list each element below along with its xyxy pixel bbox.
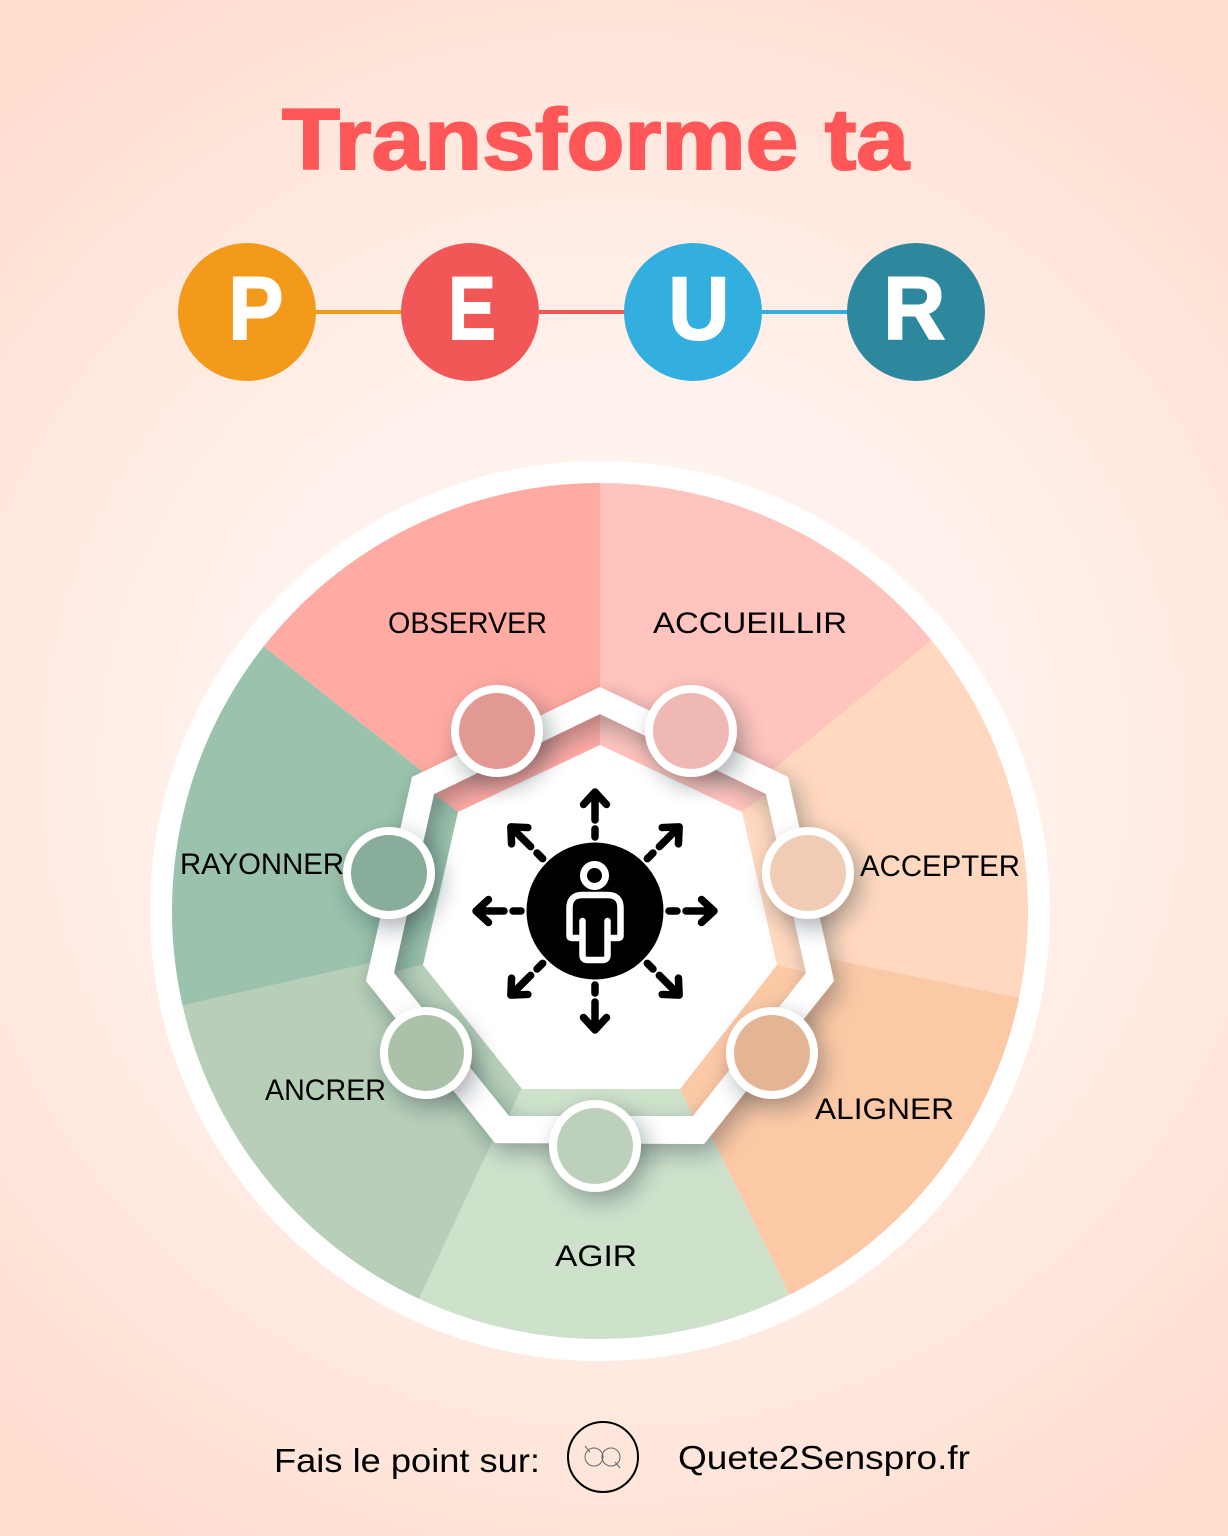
node: accepter [762, 827, 854, 919]
letter R [847, 243, 985, 381]
node: ancrer [380, 1007, 472, 1099]
footer website: Quete2Senspro.fr [678, 1439, 970, 1476]
person [570, 864, 620, 960]
label: aligner: ALIGNER [815, 1093, 954, 1126]
node: observer [451, 685, 543, 777]
letter U [624, 243, 762, 381]
letter U: U [668, 258, 729, 358]
node: aligner [726, 1007, 818, 1099]
footer text: Fais le point sur: [274, 1442, 540, 1479]
node: rayonner [343, 827, 435, 919]
node: agir [549, 1100, 641, 1192]
black disc [526, 842, 664, 980]
label: agir: AGIR [555, 1240, 637, 1273]
label: accueillir: ACCUEILLIR [653, 607, 847, 640]
letter P: P [228, 258, 283, 358]
icon: logo [568, 1422, 638, 1492]
label: ancrer: ANCRER [265, 1074, 386, 1107]
letter E [401, 243, 539, 381]
label: rayonner: RAYONNER [180, 848, 344, 881]
title: Transforme ta [282, 92, 910, 188]
outer white disc [150, 461, 1050, 1361]
icon: person radiating arrows [476, 792, 714, 1030]
letter E: E [448, 258, 496, 358]
heptagon ring [366, 687, 834, 1144]
letter P [178, 243, 316, 381]
arrows [476, 792, 714, 1030]
wheel sectors [172, 483, 1028, 1339]
label: observer: OBSERVER [388, 607, 547, 640]
node: accueillir [645, 685, 737, 777]
PEUR acronym row [178, 243, 985, 381]
inner band of sectors [394, 787, 806, 1116]
label: accepter: ACCEPTER [860, 850, 1020, 883]
central white heptagon [423, 745, 777, 1089]
letter R: R [883, 258, 945, 358]
wheel diagram [150, 461, 1050, 1361]
